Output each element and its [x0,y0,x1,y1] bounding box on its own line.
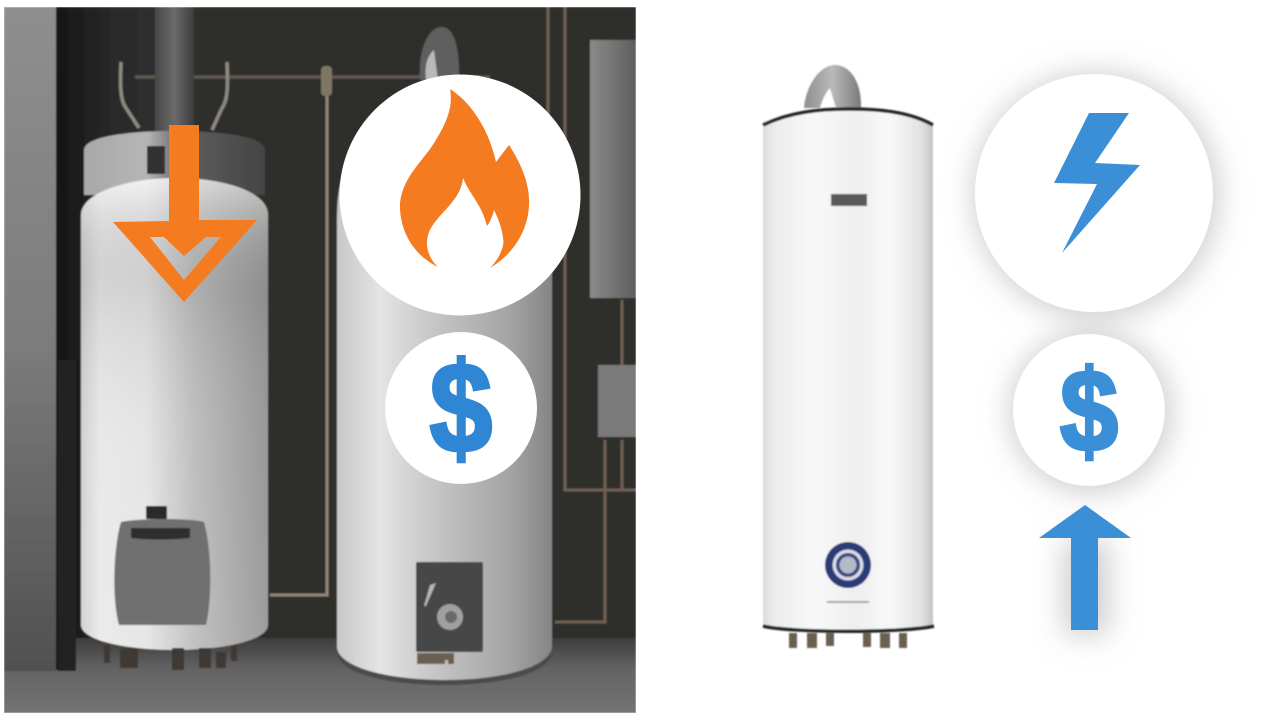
arrow: orange down [113,125,257,302]
heater one control cover [114,519,210,625]
heater two valve [417,653,454,664]
right wall panel [590,40,636,298]
right heater vent elbow [420,27,459,80]
floor [4,638,636,713]
soft shadows behind electric icons [974,73,1218,635]
electric heater badge [831,194,867,206]
heater one top cap [84,131,265,195]
icon: dollar sign right: $ [1060,347,1118,476]
electric heater caption [827,601,869,603]
back wall [193,7,636,639]
icon: white bolt badge [975,74,1213,312]
electric heater top rim [763,109,933,125]
icon: white dollar badge right [1013,334,1165,486]
heater two knob [437,604,463,630]
electric heater dial [825,542,871,588]
arrow: blue up [1039,505,1131,630]
heater two base rim [337,648,552,685]
heater two drain [444,659,449,665]
left connector pipe [121,62,139,128]
copper pipes on right wall [548,7,636,622]
heater two knob centre [445,611,457,623]
icon: white flame badge [340,74,580,316]
heater one cover slot [131,528,190,540]
side wall column [4,7,56,671]
panel: gas water heaters photo [4,7,636,713]
heater one upper shading [81,178,268,650]
heater two door glint [424,583,436,606]
icon: white dollar badge left [385,332,537,484]
heater one feet [104,645,237,670]
heater one label [147,146,165,174]
horizontal gas line [135,75,490,79]
flue pipe [155,7,194,132]
right connector pipe [212,62,227,130]
heater one display [146,506,167,519]
dark wall shading [56,7,100,670]
valve fitting [321,66,332,96]
wall column edge [58,360,76,671]
icon: orange flame [400,89,529,268]
heater one body [81,178,268,650]
heater two body [337,135,552,684]
electric heater connectors [789,633,907,648]
panel: electric water heater [763,65,934,648]
electric heater vent elbow [804,65,861,108]
electric heater body [763,109,933,632]
icon: dollar sign left: $ [430,336,492,480]
right heater vent highlight [425,50,438,80]
heater two burner door [416,562,483,652]
lower wall box [598,365,636,437]
vertical gas line [270,72,327,595]
icon: blue lightning bolt [1054,113,1140,253]
electric heater bottom rim [763,626,934,631]
